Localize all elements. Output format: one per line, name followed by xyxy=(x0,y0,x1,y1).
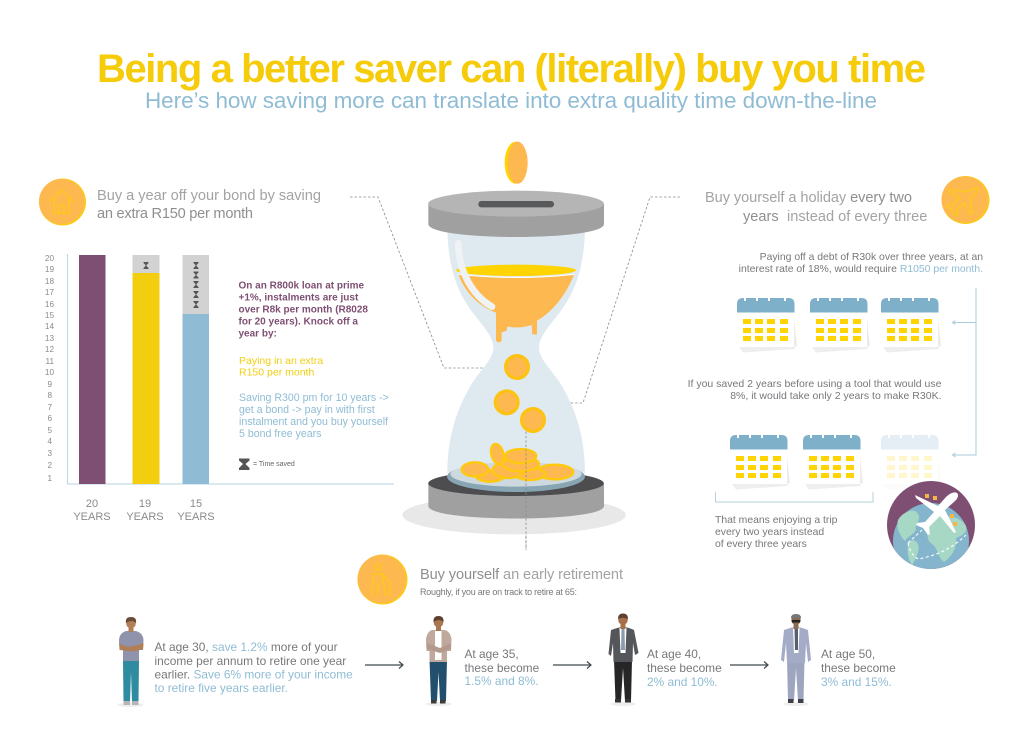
title: Being a better saver can (literally) buy you time xyxy=(97,47,926,91)
text: age 40: At age 40, xyxy=(647,647,701,661)
text: extra R150: Paying in an extra xyxy=(239,355,323,367)
heading: holiday: years xyxy=(743,209,779,225)
plane xyxy=(915,492,958,535)
text: trip: every two years instead xyxy=(715,527,824,538)
hourglass lid xyxy=(428,191,604,237)
text: saved two years: 8%, it would take only 2 years to make R30K. xyxy=(730,390,942,402)
bar: 20 years xyxy=(79,255,106,484)
y axis labels: 3 xyxy=(47,449,52,458)
legend: time saved: = Time saved xyxy=(253,461,295,468)
x axis labels: YEARS xyxy=(73,511,111,523)
person: age 35 xyxy=(426,616,452,706)
heading: holiday: instead of every three xyxy=(787,209,927,225)
calendars: two years xyxy=(730,435,941,490)
text: debt: interest rate of 18%, would require R1050 per month. xyxy=(739,264,983,275)
connector arrows xyxy=(952,288,976,457)
text: age 30: income per annum to retire one year xyxy=(154,654,346,668)
text: age 30: At age 30, save 1.2% more of your xyxy=(154,640,338,654)
text: saving R300: instalment and you buy yourself xyxy=(239,416,388,428)
text: saving R300: 5 bond free years xyxy=(239,428,321,440)
arrow xyxy=(553,662,591,668)
y axis labels: 14 xyxy=(45,322,54,331)
heading: retirement: Roughly, if you are on track to retire at 65: xyxy=(420,587,577,597)
y axis labels: 13 xyxy=(45,334,54,343)
top sand xyxy=(456,265,576,342)
y axis labels: 17 xyxy=(45,288,54,297)
text: age 40: 2% and 10%. xyxy=(647,675,718,689)
text: age 50: At age 50, xyxy=(821,647,875,661)
subtitle: Here’s how saving more can translate into extra quality time down-the-line xyxy=(145,88,877,113)
y axis labels: 10 xyxy=(45,368,54,377)
text: age 35: these become xyxy=(464,661,540,675)
hourglass illustration xyxy=(402,142,626,550)
dashed connector lines xyxy=(350,197,680,549)
bar: 15 years xyxy=(182,255,209,484)
heading: bond: Buy a year off your bond by saving xyxy=(97,188,321,204)
text: saving R300: get a bond -> pay in with first xyxy=(239,404,375,416)
x axis labels xyxy=(73,498,215,523)
x axis labels: YEARS xyxy=(177,511,215,523)
heading: retirement: Buy yourself an early retirement xyxy=(420,567,623,583)
text: age 40: these become xyxy=(647,661,722,675)
y axis labels: 11 xyxy=(46,357,54,366)
text: bond explanation: On an R800k loan at prime xyxy=(238,280,365,292)
x axis labels: YEARS xyxy=(126,511,164,523)
icon: house xyxy=(39,178,86,226)
heading: retirement xyxy=(420,567,623,597)
x axis labels: 19 xyxy=(139,498,151,510)
person: age 50 xyxy=(781,614,811,706)
y axis labels: 18 xyxy=(45,277,54,286)
bar chart: bond years xyxy=(45,254,394,523)
falling coin xyxy=(505,142,528,184)
dashed line over coins xyxy=(525,432,527,550)
text: saving R300: Saving R300 pm for 10 years -> xyxy=(239,392,389,404)
y axis labels: 7 xyxy=(47,403,52,412)
glass xyxy=(447,230,585,473)
y axis labels xyxy=(45,254,54,483)
text: bond explanation: over R8k per month (R8028 xyxy=(238,304,368,316)
heading: holiday: Buy yourself a holiday every two xyxy=(705,190,912,206)
icon: retirement couple xyxy=(358,554,408,604)
falling coins xyxy=(495,356,544,431)
y axis labels: 9 xyxy=(47,380,52,389)
text: age 50: these become xyxy=(821,661,896,675)
x axis labels: 15 xyxy=(190,498,202,510)
text: age 35: At age 35, xyxy=(464,647,519,661)
text: bond explanation: +1%, instalments are just xyxy=(238,292,359,304)
y axis labels: 1 xyxy=(47,474,52,483)
y axis labels: 16 xyxy=(45,300,54,309)
y axis labels: 8 xyxy=(47,391,52,400)
heading: bond: an extra R150 per month xyxy=(97,206,253,222)
hourglass base xyxy=(428,471,604,518)
x axis labels: 20 xyxy=(86,498,98,510)
text: trip: of every three years xyxy=(715,539,807,550)
plate xyxy=(447,461,585,492)
y axis labels: 19 xyxy=(45,265,54,274)
text: age 30: to retire five years earlier. xyxy=(154,681,288,695)
text: extra R150: R150 per month xyxy=(239,366,314,378)
icon: globe and plane xyxy=(887,481,975,569)
calendars: three years xyxy=(737,298,941,352)
text: bond explanation: year by: xyxy=(238,328,277,340)
y axis labels: 5 xyxy=(47,426,52,435)
text: age 35: 1.5% and 8%. xyxy=(464,674,539,688)
legend: time saved xyxy=(239,458,295,470)
y axis labels: 15 xyxy=(45,311,54,320)
person: age 30 xyxy=(118,617,144,707)
bracket xyxy=(716,492,873,502)
person: age 40 xyxy=(608,614,638,706)
chart axis xyxy=(68,254,394,484)
icon: plane xyxy=(942,176,990,224)
arrow xyxy=(730,662,768,668)
hourglass shadow xyxy=(402,496,626,534)
arrow xyxy=(365,662,403,668)
y axis labels: 2 xyxy=(47,461,52,470)
y axis labels: 20 xyxy=(45,254,54,263)
text: age 50: 3% and 15%. xyxy=(821,675,892,689)
text: bond explanation: for 20 years). Knock off a xyxy=(238,316,358,328)
glass highlight xyxy=(458,243,492,307)
text: saved two years: If you saved 2 years before using a tool that would use xyxy=(688,378,942,390)
y axis labels: 4 xyxy=(47,437,52,446)
bar: 19 years xyxy=(132,255,160,484)
coin pile xyxy=(462,442,573,482)
y axis labels: 6 xyxy=(47,414,52,423)
text: trip: That means enjoying a trip xyxy=(715,515,838,526)
y axis labels: 12 xyxy=(45,345,54,354)
text: debt: Paying off a debt of R30k over three years, at an xyxy=(760,252,983,263)
text: age 30: earlier. Save 6% more of your income xyxy=(154,668,353,682)
